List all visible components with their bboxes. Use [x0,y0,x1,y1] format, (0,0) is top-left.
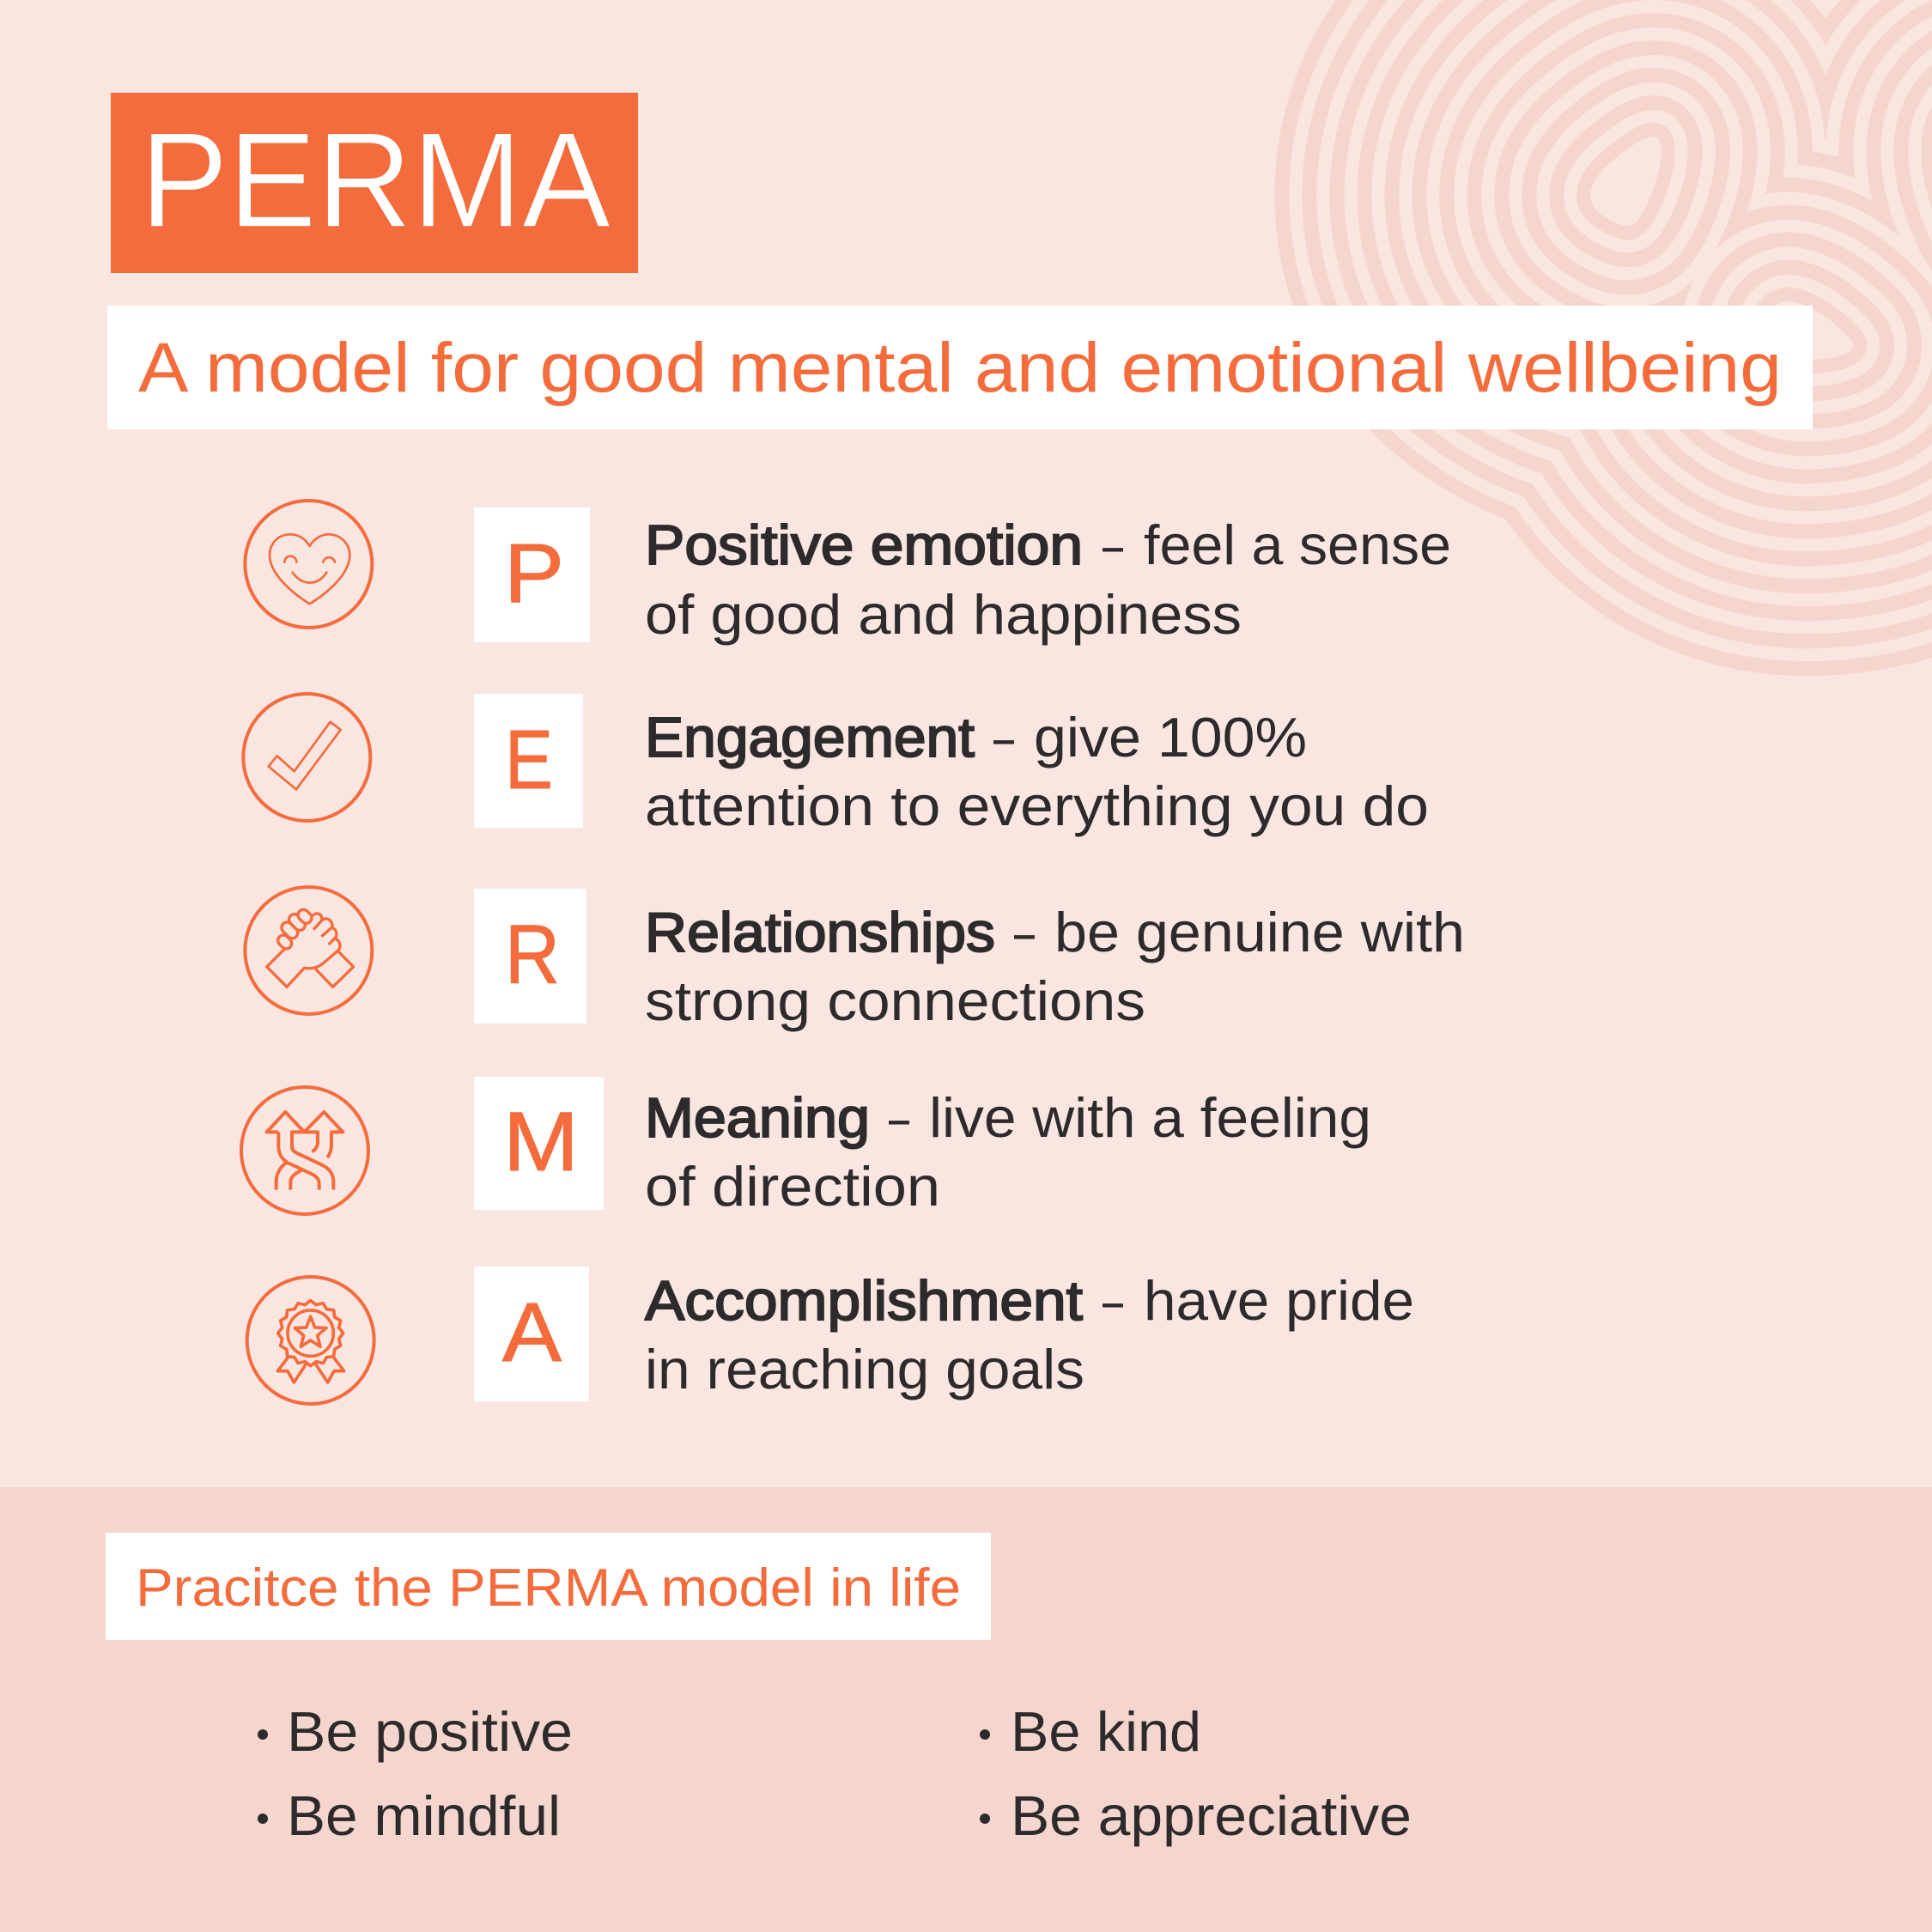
subtitle [107,306,1813,429]
text: Relationships: be genuine with [1054,901,1465,963]
text: Meaning: live with a feeling [929,1086,1371,1149]
icon: clasped hands [245,887,372,1014]
letter tile P: P [504,526,564,620]
text: Meaning: of direction [645,1155,940,1218]
text: Accomplishment: Accomplishment [645,1269,1083,1332]
letter tile M [474,1077,604,1210]
text: Relationships: strong connections [645,969,1145,1032]
bullet list: Be positive [287,1700,573,1763]
row: Engagement [243,694,1429,837]
text: Relationships: – [1014,901,1036,963]
letter tile P [474,507,590,642]
practice heading [106,1533,991,1640]
icon: check mark [243,694,370,821]
text: Relationships [645,901,1465,1032]
icon: smiling heart [245,501,372,628]
letter tile M: M [503,1095,579,1188]
text: Engagement: attention to everything you do [645,775,1429,837]
bullet list [258,1700,1412,1847]
letter tile E [474,694,583,828]
subtitle: A model for good mental and emotional wellbeing [138,329,1782,407]
row: Meaning [241,1077,1371,1218]
bullet list: Be kind [1011,1700,1201,1763]
text: Meaning [645,1086,1371,1218]
text: Engagement: Engagement [645,706,975,769]
text: Positive emotion: feel a sense [1144,513,1451,576]
letter tile A: A [502,1285,562,1379]
text: Engagement [645,706,1429,837]
text: Positive emotion: of good and happiness [645,583,1242,646]
text: Accomplishment [645,1269,1414,1400]
practice heading: Pracitce the PERMA model in life [136,1558,961,1618]
decorative concentric line pattern [1590,137,1932,360]
text: Positive emotion [645,513,1451,646]
text: Meaning: Meaning [645,1086,870,1149]
text: Engagement: give 100% [1034,706,1307,769]
row: Accomplishment [247,1267,1414,1404]
text: Meaning: – [889,1086,910,1149]
text: Engagement: – [993,706,1015,769]
icon: crossing arrows [241,1087,368,1214]
text: Accomplishment: in reaching goals [645,1338,1084,1400]
text: Positive emotion: Positive emotion [645,513,1083,576]
row: Relationships [245,887,1465,1032]
letter tile R: R [505,908,560,1001]
text: Positive emotion: – [1103,513,1124,576]
bullet list: Be appreciative [1011,1784,1412,1847]
bullet list: Be mindful [287,1784,561,1847]
panel: practice [0,1487,1932,1932]
text: Relationships: Relationships [645,901,995,963]
letter tile E: E [505,713,553,806]
text: Accomplishment: – [1103,1269,1124,1332]
letter tile A [474,1267,589,1401]
icon: award rosette [247,1277,374,1404]
title: PERMA: PERMA [140,105,611,256]
text: Accomplishment: have pride [1144,1269,1414,1332]
letter tile R [474,889,586,1024]
row: Positive emotion [245,501,1451,646]
